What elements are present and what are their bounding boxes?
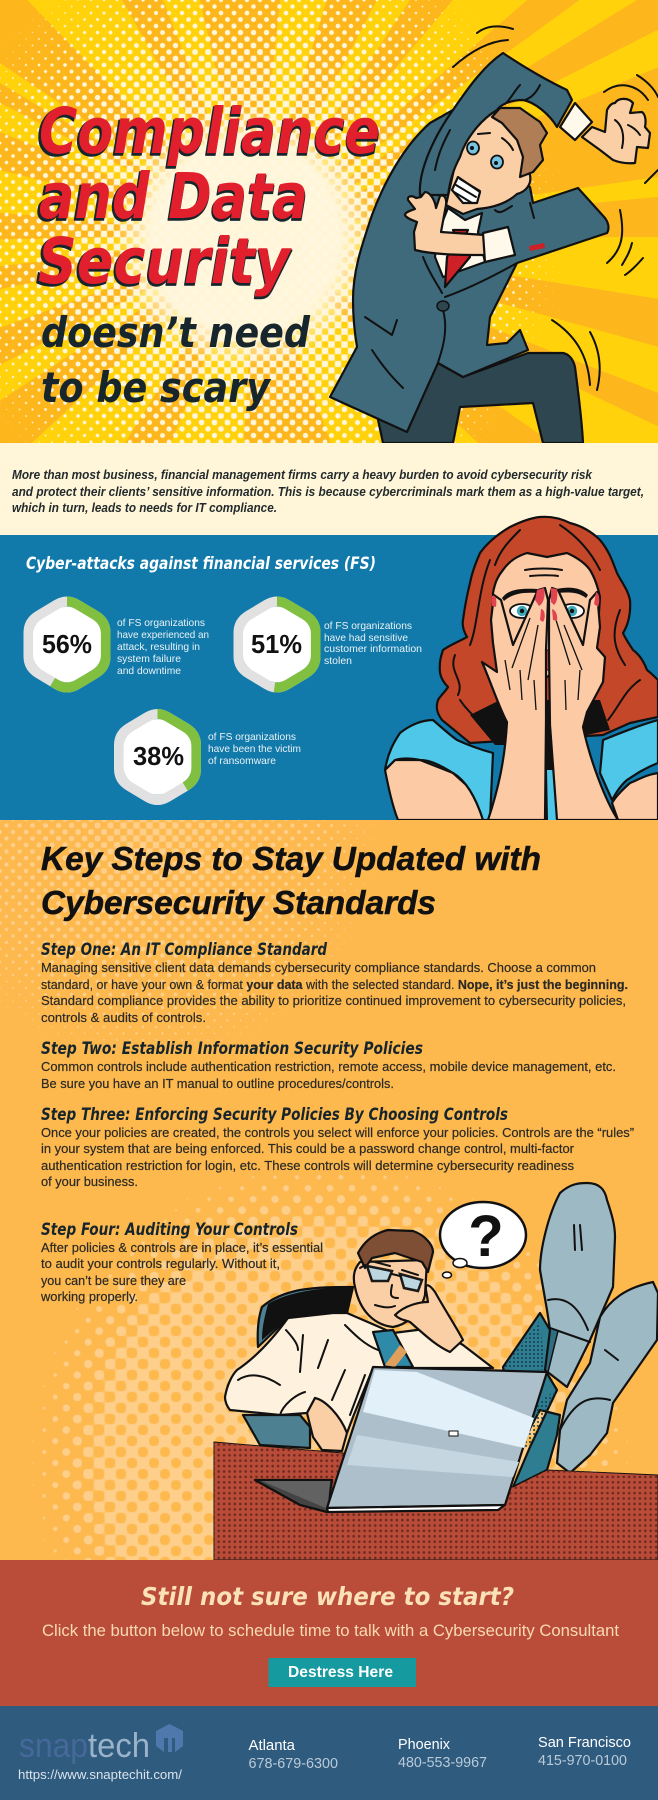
intro text <box>12 467 644 515</box>
title: Compliance and Data Security: Security <box>36 227 293 300</box>
step one: Standard compliance provides the ability to prioritize continued improvement to cybersecurity policies, <box>41 993 626 1008</box>
panel: cyber-attacks <box>0 517 658 820</box>
office: atlanta <box>248 1738 338 1772</box>
right shoulder and arm <box>612 773 658 820</box>
step two: Be sure you have an IT manual to outline procedures/controls. <box>41 1076 394 1091</box>
title: Compliance and Data Security <box>36 95 380 300</box>
step three: of your business. <box>41 1174 138 1189</box>
panel: intro <box>0 443 658 535</box>
lower arm and hand <box>405 192 485 255</box>
stat: 38%: of FS organizations <box>208 731 296 743</box>
website url: https://www.snaptechit.com/ <box>18 1768 183 1782</box>
step three: authentication restriction for login, etc. These controls will determine cybersecurity readiness <box>41 1158 575 1173</box>
logo: snaptech: snap <box>19 1727 88 1765</box>
heading: key steps: Key Steps to Stay Updated with <box>41 840 541 877</box>
tie <box>373 1330 413 1367</box>
motion lines <box>453 26 658 390</box>
stat: 38% <box>119 714 301 800</box>
trousers <box>377 353 583 443</box>
stat: 56%: have experienced an <box>117 629 209 641</box>
step four: working properly. <box>40 1289 138 1304</box>
chair <box>243 1287 353 1448</box>
stat: 51%: stolen <box>324 655 352 667</box>
office: phoenix <box>398 1737 487 1771</box>
panel: key steps <box>0 820 658 1560</box>
step two: Step Two: Establish Information Security Policies <box>41 1039 423 1058</box>
panel: footer <box>0 1706 658 1800</box>
hair shadows <box>453 525 640 735</box>
jacket seams and pocket <box>365 203 534 388</box>
lower cuff <box>483 227 515 262</box>
eyes and brows <box>502 588 588 618</box>
intro text: which in turn, leads to needs for IT compliance. <box>12 500 277 515</box>
panel: call to action <box>0 1560 658 1706</box>
button: destress here: Destress Here <box>288 1664 393 1681</box>
stat: 56%: of FS organizations <box>117 617 205 629</box>
button: destress here <box>268 1658 416 1687</box>
step one: Step One: An IT Compliance Standard <box>41 940 327 959</box>
step three: Once your policies are created, the controls you select will enforce your policies. Controls are the “rules” <box>41 1125 634 1140</box>
office: atlanta: 678-679-6300 <box>248 1756 338 1772</box>
neckline <box>540 715 562 820</box>
hero halftone glow <box>0 0 566 443</box>
cta text: Click the button below to schedule time to talk with a Cybersecurity Consultant <box>42 1622 619 1640</box>
hair <box>492 108 547 177</box>
illustration: scared woman covering her face <box>385 517 658 820</box>
back shoe <box>557 1282 658 1473</box>
heading: key steps <box>41 840 541 921</box>
office: atlanta: Atlanta <box>248 1738 296 1754</box>
illustration: frightened businessman <box>330 26 658 443</box>
step two <box>41 1039 616 1091</box>
stat: 51%: 51% <box>251 629 302 659</box>
step four: After policies & controls are in place, it’s essential <box>41 1240 323 1255</box>
stat: 38%: have been the victim <box>208 743 301 755</box>
trousers <box>503 1313 560 1487</box>
office: phoenix: Phoenix <box>398 1737 451 1753</box>
step one: Managing sensitive client data demands cybersecurity compliance standards. Choose a common <box>41 960 596 975</box>
title: Compliance and Data Security: and Data <box>37 162 308 235</box>
left hand and forearm <box>482 588 548 820</box>
intro text: More than most business, financial management firms carry a heavy burden to avoid cybersecurity risk <box>12 467 593 482</box>
stat: 51%: of FS organizations <box>324 620 412 632</box>
title: Compliance and Data Security: Compliance <box>39 95 380 168</box>
stat: 56% <box>28 602 209 687</box>
step four <box>40 1220 323 1304</box>
left sleeve <box>385 720 493 820</box>
subtitle: doesn't need to be scary: doesn’t need <box>41 308 311 357</box>
thought bubble: ? <box>468 1204 504 1269</box>
laptop <box>255 1367 547 1512</box>
office: san francisco: San Francisco <box>538 1735 631 1751</box>
logo: snaptech <box>19 1724 183 1765</box>
resting hand <box>307 1398 347 1451</box>
stat: 56%: 56% <box>42 629 92 659</box>
step one <box>41 940 628 1025</box>
right sleeve <box>600 720 658 800</box>
stat: 38%: 38% <box>133 741 184 771</box>
shirt collar and tie <box>435 208 485 287</box>
hair <box>358 1230 433 1272</box>
step four: Step Four: Auditing Your Controls <box>41 1220 298 1239</box>
step three: in your system that are being enforced. This could be a password change control, multi-factor <box>41 1141 575 1156</box>
upper hand <box>582 99 650 163</box>
stat: 56%: attack, resulting in <box>117 641 200 653</box>
jacket body <box>330 110 608 432</box>
face <box>493 553 600 677</box>
hair <box>437 517 658 743</box>
halftone dots <box>0 820 658 1560</box>
upper cuff <box>560 103 592 140</box>
office: san francisco: 415-970-0100 <box>538 1753 627 1769</box>
stat: 38%: of ransomware <box>208 755 276 767</box>
step one: controls & audits of controls. <box>41 1010 206 1025</box>
hero background: sunburst rays <box>0 0 658 443</box>
mouth <box>452 177 480 203</box>
step four: you can’t be sure they are <box>41 1273 186 1288</box>
step one: standard, or have your own & format your data with the selected standard. Nope, it’s just the beginning. <box>41 977 628 992</box>
right hand and forearm <box>549 588 618 820</box>
shirt <box>225 1313 493 1433</box>
heading: key steps: Cybersecurity Standards <box>41 884 436 921</box>
subtitle: doesn't need to be scary: to be scary <box>41 363 271 412</box>
stat: 51%: customer information <box>324 643 422 655</box>
step two: Common controls include authentication restriction, remote access, mobile device management, etc. <box>41 1059 616 1074</box>
mouth <box>544 650 556 670</box>
step three: Step Three: Enforcing Security Policies By Choosing Controls <box>41 1105 508 1124</box>
subtitle: doesn't need to be scary <box>41 308 311 412</box>
desk <box>214 1442 658 1560</box>
jacket button <box>437 301 449 311</box>
title: Compliance and Data Security: Security <box>38 225 293 298</box>
title: Compliance and Data Security: Compliance <box>37 97 380 170</box>
raised sleeve <box>420 53 572 195</box>
stat: 51%: have had sensitive <box>324 632 408 644</box>
propping hand <box>395 1285 463 1352</box>
heading: cyber-attacks: Cyber-attacks against financial services (FS) <box>26 554 376 573</box>
eyes <box>467 142 503 168</box>
office: phoenix: 480-553-9967 <box>398 1755 487 1771</box>
stat: 56%: and downtime <box>117 665 181 677</box>
cta heading: Still not sure where to start? <box>141 1582 514 1611</box>
left shoulder and arm <box>385 760 490 820</box>
glasses <box>367 1266 422 1291</box>
front shoe <box>540 1183 615 1387</box>
stat: 56%: system failure <box>117 653 181 665</box>
thought bubble <box>440 1202 526 1278</box>
step four: to audit your controls regularly. Without it, <box>41 1256 280 1271</box>
title: Compliance and Data Security: and Data <box>39 160 308 233</box>
stat: 51% <box>238 602 422 687</box>
head <box>354 1260 427 1327</box>
illustration: pensive man at laptop <box>214 1183 658 1560</box>
logo: snaptech: tech <box>88 1727 150 1765</box>
buttons <box>529 243 545 251</box>
face <box>446 106 530 214</box>
step three <box>41 1105 634 1189</box>
office: san francisco <box>538 1735 631 1769</box>
